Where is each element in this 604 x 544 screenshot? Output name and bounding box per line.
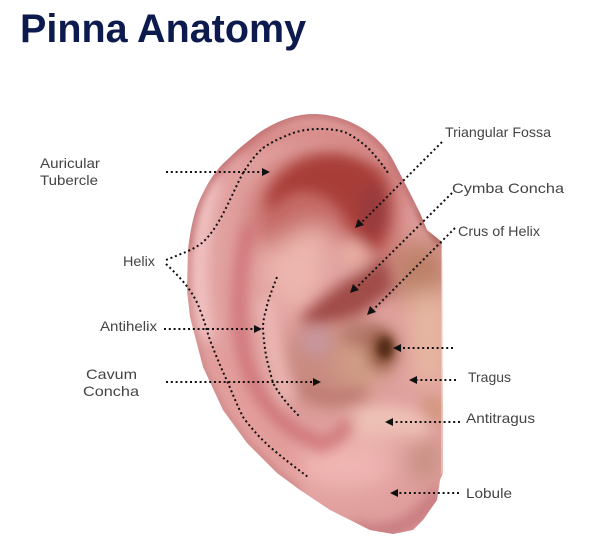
arrow: Lobule (390, 489, 459, 497)
arrow: Antihelix (164, 325, 262, 333)
ear illustration (180, 105, 450, 540)
label: Crus of Helix: Crus of Helix (458, 223, 540, 239)
arrow: Antitragus (385, 418, 460, 426)
arrow: Tragus (409, 376, 456, 384)
label: Triangular Fossa: Triangular Fossa (445, 124, 551, 140)
label: Cavum Concha: Cavum (86, 366, 137, 382)
label: Lobule: Lobule (466, 485, 512, 501)
label: Auricular Tubercle: Tubercle (40, 172, 98, 188)
title: Pinna Anatomy (20, 7, 306, 51)
arrow: Cymba Concha (350, 193, 452, 293)
label: Cymba Concha: Cymba Concha (452, 180, 564, 196)
label: Helix: Helix (123, 253, 155, 269)
arrow: Antihelix curve (263, 277, 300, 417)
label: Cavum Concha: Concha (83, 383, 139, 399)
label: Antihelix: Antihelix (100, 318, 157, 334)
label: Tragus: Tragus (468, 369, 511, 385)
arrow: Cavum Concha (166, 378, 321, 386)
arrow: Helix upper curve (166, 129, 388, 260)
label: Auricular Tubercle (40, 155, 100, 188)
soft large colour fields (251, 149, 450, 489)
label: Cavum Concha (83, 366, 139, 399)
arrow: Crus of Helix (367, 228, 455, 315)
arrow: Auricular Tubercle (166, 168, 270, 176)
arrow: Helix lower curve (166, 264, 308, 477)
label: Auricular Tubercle: Auricular (40, 155, 100, 171)
arrow: Triangular Fossa (355, 142, 442, 228)
arrow: ear canal (393, 344, 453, 352)
label: Antitragus: Antitragus (466, 410, 535, 426)
